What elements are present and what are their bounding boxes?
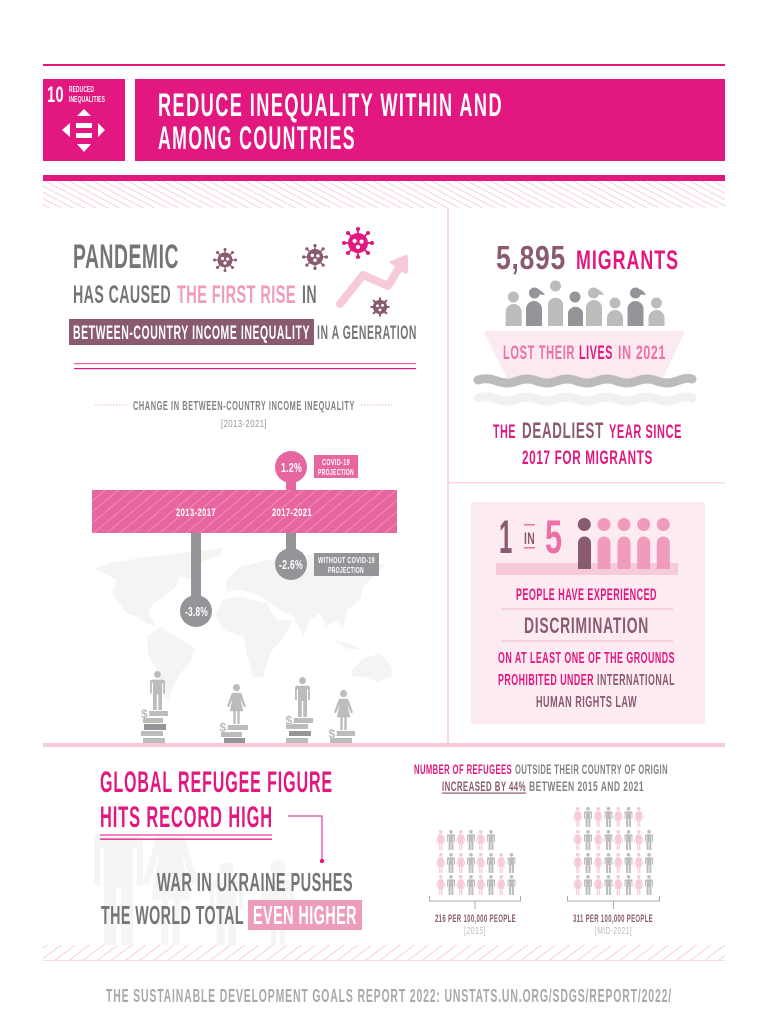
caption: 2015: [2015] <box>464 925 486 937</box>
text: number of refugees: BETWEEN 2015 AND 2021 <box>529 779 644 794</box>
label: in <box>524 524 535 548</box>
chart title: [2013-2021] <box>221 418 267 430</box>
text: discrimination: DISCRIMINATION <box>524 613 649 638</box>
caption: mid-2021: 311 PER 100,000 PEOPLE <box>573 913 653 925</box>
text: grounds: INTERNATIONAL <box>597 672 675 689</box>
subheading: first rise: IN <box>302 281 317 309</box>
highlighted subheading: between-country income inequality: BETWEEN-COUNTRY INCOME INEQUALITY <box>73 322 310 344</box>
number: 1: 1 <box>499 510 513 563</box>
label: covid-19 projection: PROJECTION <box>318 467 354 477</box>
person on four coins <box>284 677 313 743</box>
icon: five people <box>496 518 678 575</box>
text: grounds: PROHIBITED UNDER <box>498 672 594 689</box>
text: deadliest year: DEADLIEST <box>522 418 604 443</box>
bottom hatch band <box>43 945 725 961</box>
heading: global refugee figure: HITS RECORD HIGH <box>100 801 273 834</box>
boat hull with text: LIVES <box>579 342 613 364</box>
icons: people on coin stacks <box>140 671 355 743</box>
label: in: IN <box>524 529 535 548</box>
caption: mid-2021 <box>568 896 660 937</box>
boat hull with text: LOST THEIR <box>503 342 575 364</box>
person on four coins: $ <box>286 714 292 728</box>
title banner <box>135 79 725 161</box>
text: deadliest year <box>493 418 682 469</box>
stem and bubble: -3.8%: -3.8% <box>185 604 208 619</box>
caption: mid-2021: [MID-2021] <box>595 925 632 937</box>
text: number of refugees <box>414 762 668 794</box>
label: covid-19 projection: COVID-19 <box>322 457 350 467</box>
text: grounds <box>498 650 675 711</box>
text: war in ukraine <box>101 867 362 930</box>
faded family silhouettes <box>94 803 299 945</box>
person on three coins: $ <box>220 720 226 734</box>
period bar: 2017-2021 <box>272 507 312 519</box>
label: without covid-19 projection: PROJECTION <box>328 565 364 575</box>
text: war in ukraine: WAR IN UKRAINE PUSHES <box>157 867 353 897</box>
chart title <box>95 399 394 430</box>
text: number of refugees: INCREASED BY 44% <box>442 779 526 794</box>
person on two coins: $ <box>328 727 336 741</box>
period bar <box>92 490 397 533</box>
person on three coins <box>218 684 248 743</box>
stem and bubble: -2.6% <box>275 533 307 580</box>
text: grounds: HUMAN RIGHTS LAW <box>536 694 637 711</box>
section dividers <box>43 208 725 747</box>
subheading: first rise: THE FIRST RISE <box>177 281 296 309</box>
icon: SDG 10 tile <box>43 79 125 161</box>
person on five coins <box>140 671 168 743</box>
title banner: AMONG COUNTRIES <box>158 120 356 156</box>
label: without covid-19 projection <box>314 553 379 576</box>
person on two coins <box>327 690 355 743</box>
heading: 5,895 migrants: 5,895 <box>496 239 566 276</box>
double rule <box>74 363 416 369</box>
stem and bubble: -2.6%: -2.6% <box>279 557 303 572</box>
chart title: CHANGE IN BETWEEN-COUNTRY INCOME INEQUALITY <box>133 399 355 413</box>
heading: global refugee figure <box>100 766 333 840</box>
heading: global refugee figure: GLOBAL REFUGEE FIGURE <box>100 766 333 799</box>
label: covid-19 projection <box>314 455 358 478</box>
highlighted subheading: between-country income inequality <box>69 319 417 345</box>
pictogram: mid-2021 refugees <box>573 807 653 895</box>
icon: SDG 10 tile: REDUCED <box>69 85 94 94</box>
chart: income inequality lollipops <box>92 451 397 627</box>
heading: pandemic: PANDEMIC <box>73 238 179 276</box>
header top rule <box>43 64 725 66</box>
heading: 5,895 migrants: MIGRANTS <box>576 245 679 275</box>
boat hull with text: IN 2021 <box>618 342 666 364</box>
stem and bubble: -3.8% <box>180 533 212 627</box>
text: deadliest year: YEAR SINCE <box>609 422 682 443</box>
top band with hatch <box>43 175 725 208</box>
text: war in ukraine: EVEN HIGHER <box>253 900 357 930</box>
label: without covid-19 projection: WITHOUT COVID-19 <box>318 555 375 565</box>
icon: rising arrow <box>340 255 408 304</box>
person on five coins: $ <box>141 707 148 721</box>
highlighted subheading: between-country income inequality: IN A GENERATION <box>317 322 417 344</box>
period bar: 2013-2017 <box>176 507 216 519</box>
title banner: REDUCE INEQUALITY WITHIN AND <box>158 87 503 123</box>
text: war in ukraine: THE WORLD TOTAL <box>101 900 244 930</box>
text: deadliest year: 2017 FOR MIGRANTS <box>522 447 653 469</box>
waves <box>478 378 692 401</box>
panel: 1 in 5 discrimination <box>471 502 705 724</box>
heading: 5,895 migrants <box>496 239 679 276</box>
subheading: first rise: HAS CAUSED <box>73 281 171 309</box>
caption: 2015: 216 PER 100,000 PEOPLE <box>435 913 516 925</box>
icon: SDG 10 tile: INEQUALITIES <box>69 95 105 104</box>
boat hull with text <box>484 331 684 378</box>
text: deadliest year: THE <box>493 422 516 443</box>
number: 5: 5 <box>545 510 563 563</box>
icon: SDG 10 tile: 10 <box>47 82 64 107</box>
text: number of refugees: NUMBER OF REFUGEES <box>414 762 512 777</box>
caption: 2015 <box>430 896 520 937</box>
connector line <box>288 816 324 863</box>
stem and bubble: 1.2%: 1.2% <box>281 460 302 475</box>
icon: people on boat <box>506 280 664 326</box>
world map background <box>95 548 392 700</box>
pictogram: 2015 refugees <box>436 830 516 895</box>
icons: viruses <box>213 227 389 316</box>
stem and bubble: 1.2% <box>275 451 307 492</box>
